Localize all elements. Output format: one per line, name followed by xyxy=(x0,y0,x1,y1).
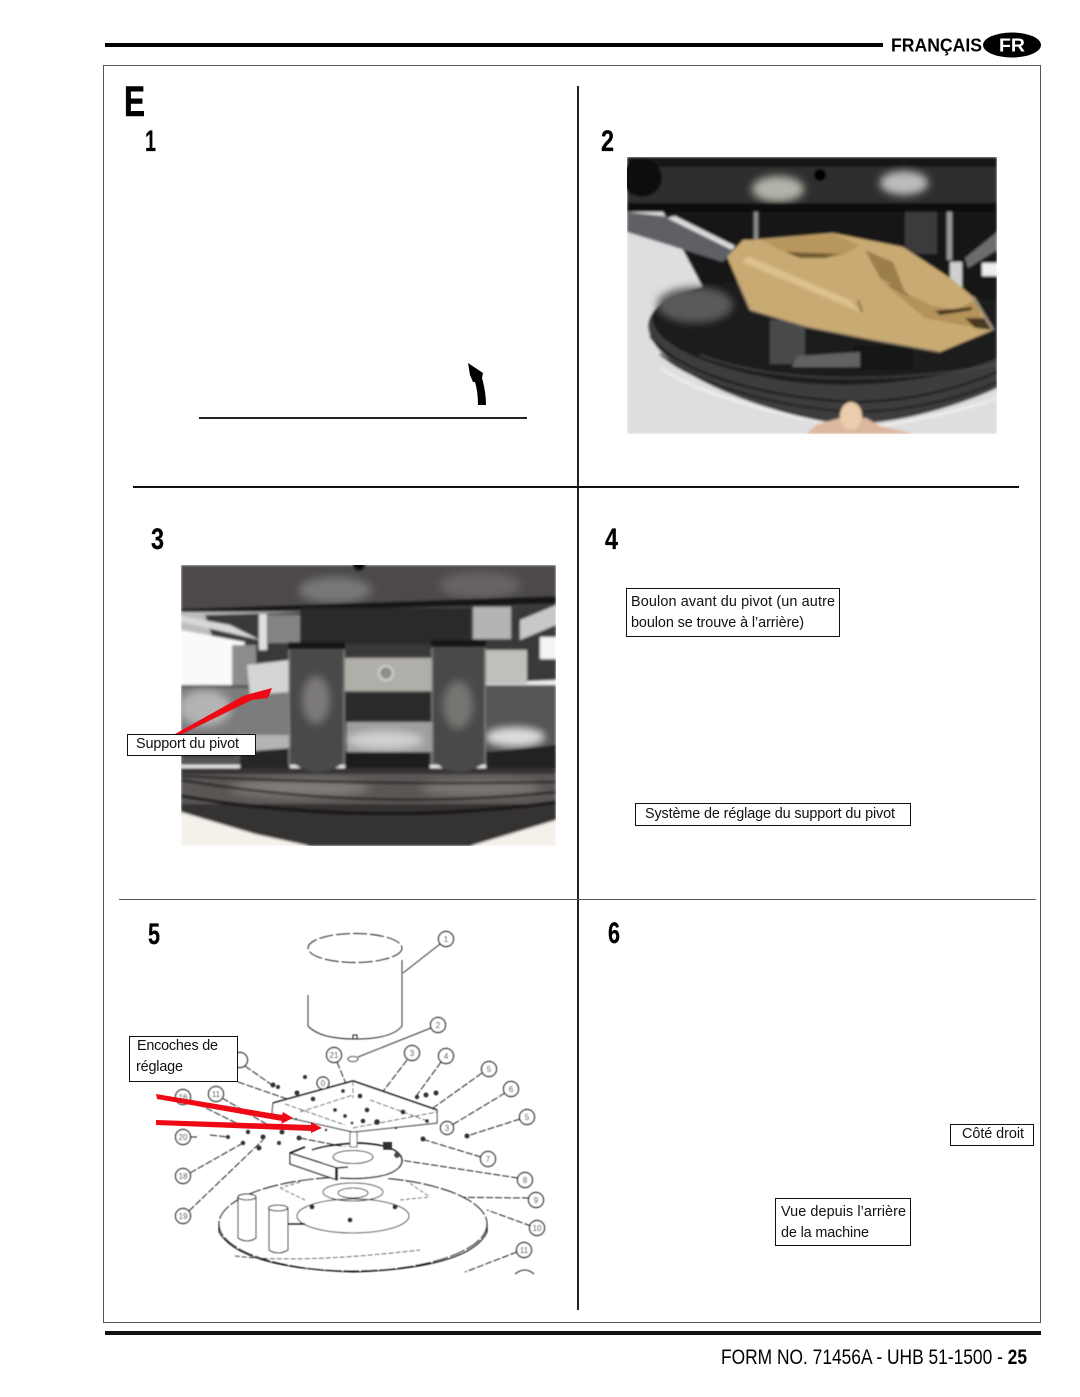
panel 2 xyxy=(601,125,997,434)
paper bag xyxy=(727,233,993,352)
rule xyxy=(199,417,527,419)
part number callouts: 18 xyxy=(179,1172,188,1181)
part number callouts: 0 xyxy=(321,1079,326,1088)
leader lines xyxy=(189,944,531,1272)
base disk xyxy=(219,1177,487,1272)
part number callouts: 4 xyxy=(444,1052,449,1061)
dividers xyxy=(119,86,1036,1310)
photo: pivot support xyxy=(179,559,556,846)
posts xyxy=(288,642,345,772)
label: right side xyxy=(950,1124,1034,1146)
panel 6 xyxy=(608,917,1034,1246)
part number callouts: 10 xyxy=(533,1224,542,1233)
page frame xyxy=(104,66,1040,1322)
part number callouts: 11 xyxy=(520,1246,529,1255)
label: Encoches de réglage: Encoches de xyxy=(137,1038,218,1054)
part number callouts: 20 xyxy=(179,1133,188,1142)
icon: curved arrow xyxy=(468,363,486,405)
part number callouts: 7 xyxy=(486,1155,491,1164)
label: rear view: Vue depuis l’arrière xyxy=(781,1204,906,1220)
arrows: red pointers to notches xyxy=(156,1094,322,1133)
cylinder xyxy=(308,934,402,1039)
arrow: red pointer to support xyxy=(175,688,272,734)
part number callouts: 3 xyxy=(445,1124,450,1133)
label: Support du pivot: Support du pivot xyxy=(136,736,239,752)
part number callouts: 1 xyxy=(444,935,449,944)
footer xyxy=(105,1331,1041,1369)
step number 5: 5 xyxy=(148,918,160,951)
part number callouts: 16 xyxy=(179,1093,188,1102)
panel 5 xyxy=(130,918,544,1274)
label: front pivot bolt: Boulon avant du pivot (un autre xyxy=(631,594,835,610)
footer: FORM NO. 71456A - UHB 51-1500 - 25 xyxy=(721,1346,1027,1369)
step number 2: 2 xyxy=(601,125,614,158)
label: Encoches de réglage xyxy=(130,1036,238,1082)
label: Encoches de réglage: réglage xyxy=(136,1059,183,1075)
panel 3 xyxy=(128,523,556,846)
label: adjustment system xyxy=(636,804,910,826)
label: Support du pivot xyxy=(128,734,256,756)
panel 1 xyxy=(145,125,527,419)
step number 3: 3 xyxy=(151,523,164,556)
part number callouts: 2 xyxy=(436,1021,441,1030)
posts xyxy=(238,1194,305,1253)
header: language tag: FR xyxy=(999,36,1025,56)
header: language tag: FRANÇAIS xyxy=(891,36,982,56)
lower bracket xyxy=(290,1142,402,1180)
panel 4 xyxy=(605,523,910,826)
diagram: exploded view xyxy=(176,932,544,1274)
label: rear view: de la machine xyxy=(781,1225,869,1241)
label: front pivot bolt: boulon se trouve à l’arrière) xyxy=(631,615,804,631)
step number 1: 1 xyxy=(145,125,156,158)
label: adjustment system: Système de réglage du support du pivot xyxy=(645,806,895,822)
header: language tag xyxy=(105,32,1041,58)
part number callouts: 5 xyxy=(525,1113,530,1122)
pad driver disk xyxy=(646,310,997,424)
section letter: E xyxy=(124,78,145,126)
mounting plate xyxy=(226,1056,470,1150)
label: rear view xyxy=(776,1198,910,1246)
part number callouts: 3 xyxy=(410,1049,415,1058)
part number callouts: 9 xyxy=(534,1196,539,1205)
part number callouts: 5 xyxy=(487,1065,492,1074)
part number callouts: 11 xyxy=(212,1090,221,1099)
step number 4: 4 xyxy=(605,523,618,556)
part number callouts: 21 xyxy=(330,1051,339,1060)
photo: paper bag on pad driver xyxy=(622,157,997,434)
fingers xyxy=(806,418,915,434)
step number 6: 6 xyxy=(608,917,620,950)
part number callouts: 6 xyxy=(509,1085,514,1094)
part number callouts: 8 xyxy=(523,1176,528,1185)
label: front pivot bolt xyxy=(626,588,840,636)
label: right side: Côté droit xyxy=(962,1126,1024,1142)
part number callouts xyxy=(176,932,544,1274)
part number callouts: 19 xyxy=(179,1212,188,1221)
